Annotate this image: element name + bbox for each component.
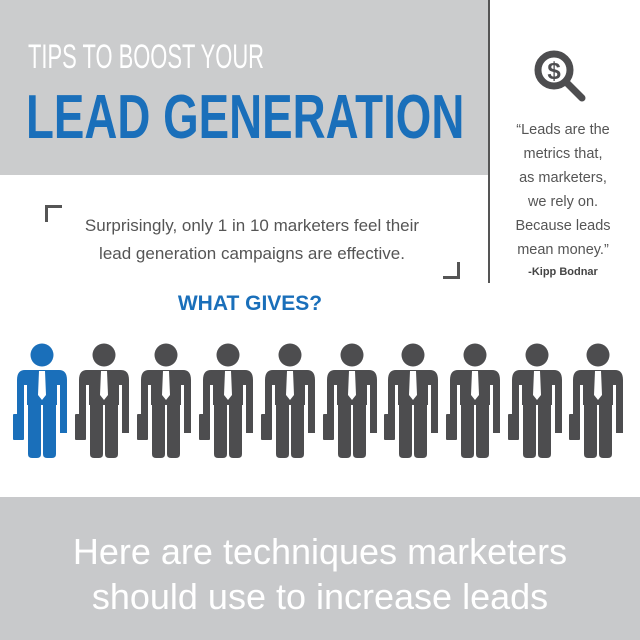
bottom text: should use to increase leads bbox=[92, 576, 548, 617]
quote: Kipp Bodnar bbox=[515, 122, 611, 278]
bottom text: Here are techniques marketers bbox=[73, 531, 567, 572]
heading: what gives: WHAT GIVES? bbox=[178, 292, 322, 315]
people grey bbox=[75, 344, 623, 458]
icon: magnifier dollar: $ bbox=[547, 58, 561, 85]
quote: Kipp Bodnar: metrics that, bbox=[524, 146, 602, 162]
quote: Kipp Bodnar: -Kipp Bodnar bbox=[528, 266, 598, 278]
quote: Kipp Bodnar: Because leads bbox=[515, 218, 611, 234]
stat text block: lead generation campaigns are effective. bbox=[99, 244, 405, 263]
header band bbox=[0, 0, 489, 175]
title main: LEAD GENERATION bbox=[26, 83, 464, 152]
icon: magnifier dollar bbox=[534, 50, 586, 102]
quote: Kipp Bodnar: as marketers, bbox=[519, 170, 607, 186]
quote: Kipp Bodnar: “Leads are the bbox=[516, 122, 610, 138]
bottom text bbox=[73, 531, 567, 617]
title small: TIPS TO BOOST YOUR bbox=[28, 38, 264, 76]
quote: Kipp Bodnar: we rely on. bbox=[528, 194, 598, 210]
vertical divider bbox=[488, 0, 490, 283]
bottom band bbox=[0, 497, 640, 640]
quote: Kipp Bodnar: mean money.” bbox=[517, 242, 609, 258]
stat text block bbox=[45, 205, 460, 279]
people chart bbox=[13, 344, 623, 458]
person blue bbox=[13, 344, 67, 458]
stat text block: Surprisingly, only 1 in 10 marketers feel their bbox=[85, 216, 419, 235]
